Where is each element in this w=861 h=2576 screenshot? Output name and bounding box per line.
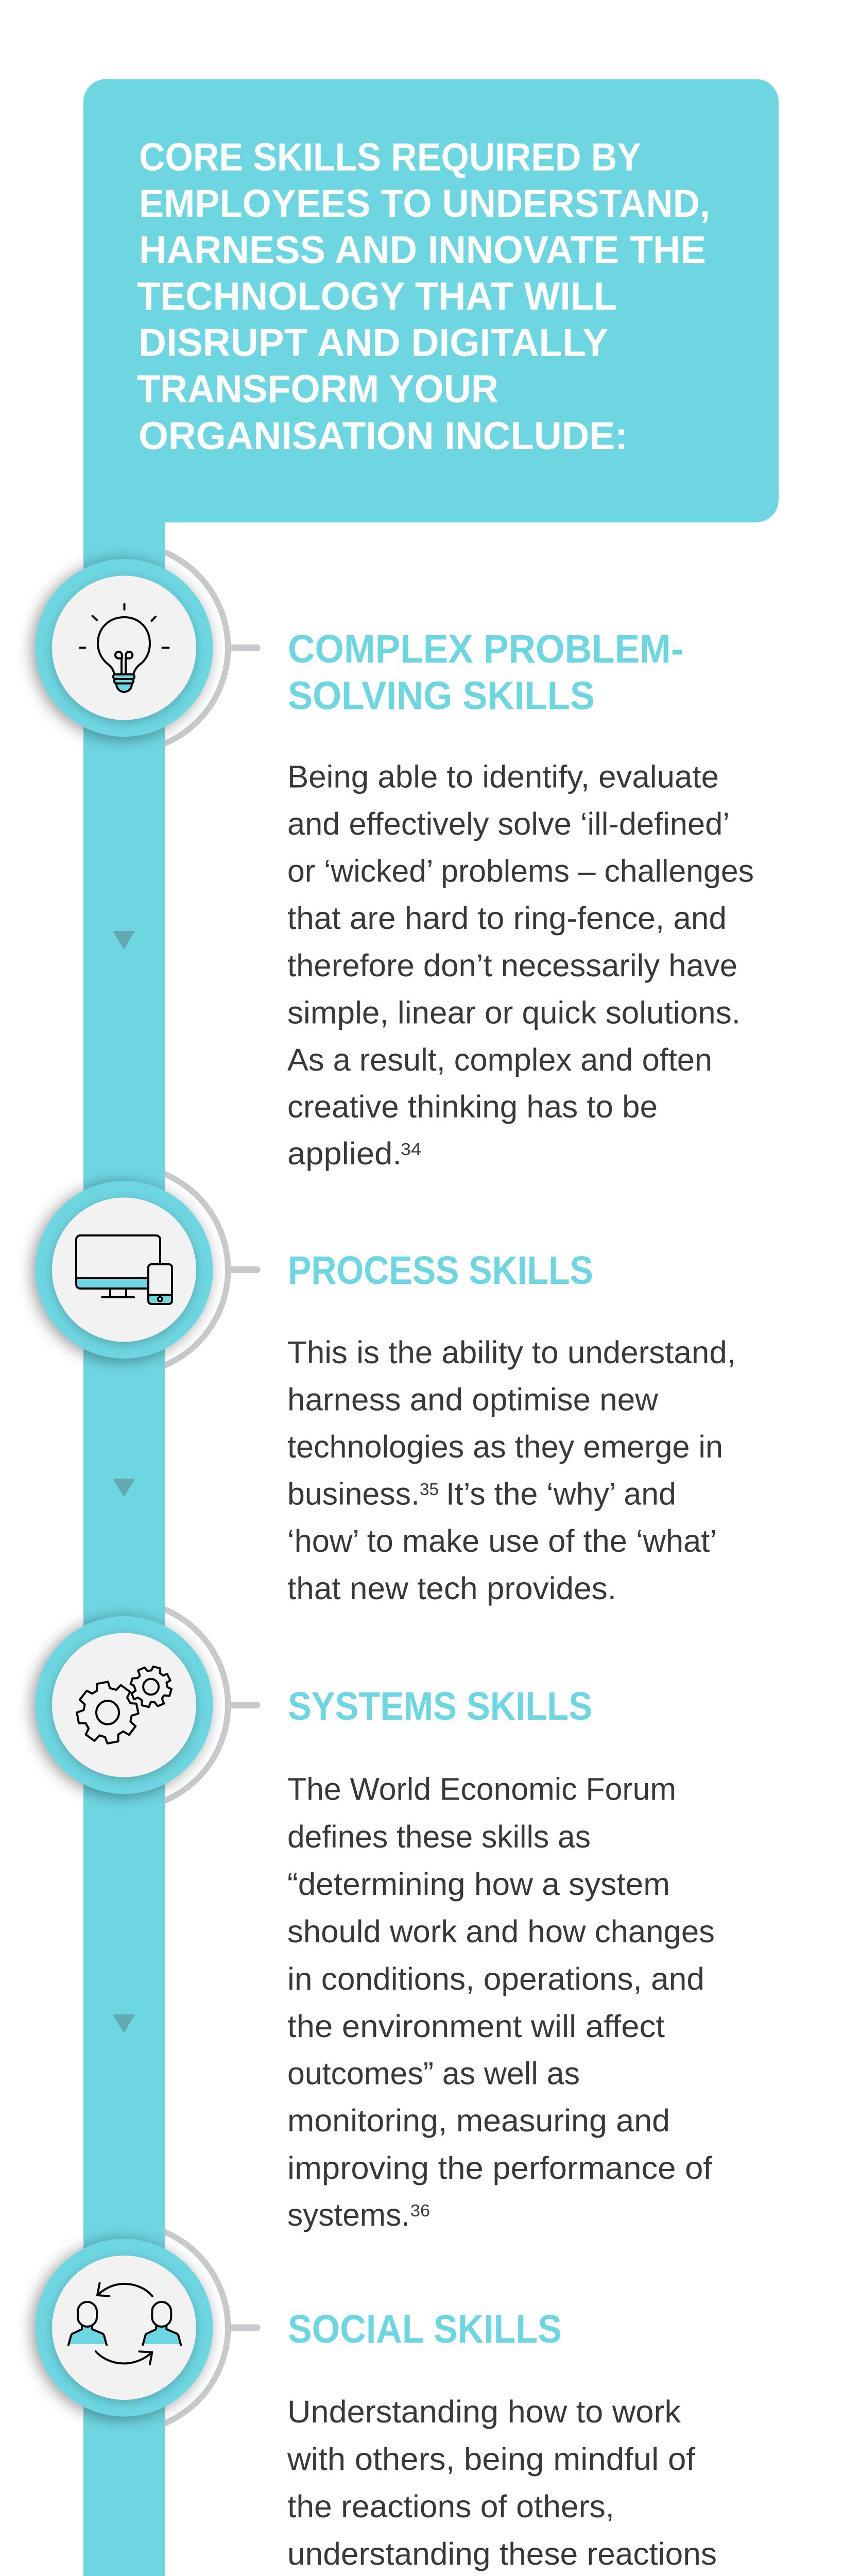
heading: SOCIAL SKILLS — [288, 2307, 562, 2351]
icon: monitor and phone — [76, 1235, 172, 1304]
text block: creative thinking has to be — [287, 1089, 658, 1124]
text block: systems. — [287, 2197, 410, 2232]
icon: lightbulb — [80, 604, 169, 692]
text block: therefore don’t necessarily have — [287, 948, 737, 983]
text block: and effectively solve ‘ill-defined’ — [287, 806, 730, 841]
text block: or ‘wicked’ problems – challenges — [287, 853, 754, 888]
text block — [287, 1771, 715, 2232]
text block: simple, linear or quick solutions. — [287, 995, 741, 1030]
title: ORGANISATION INCLUDE: — [139, 414, 628, 458]
text block: technologies as they emerge in — [287, 1429, 723, 1464]
text block: It’s the ‘why’ and — [446, 1477, 676, 1512]
text block: with others, being mindful of — [287, 2442, 696, 2477]
text block: This is the ability to understand, — [287, 1335, 736, 1370]
arrow — [113, 1479, 135, 1497]
text block: defines these skills as — [287, 1819, 591, 1854]
title: HARNESS AND INNOVATE THE — [139, 228, 706, 272]
node: lightbulb — [20, 544, 257, 752]
text block: 35 — [420, 1480, 439, 1499]
text block: The World Economic Forum — [287, 1771, 676, 1806]
text block: outcomes” as well as — [287, 2056, 580, 2091]
title: TECHNOLOGY THAT WILL — [137, 275, 617, 318]
text block: 36 — [410, 2201, 430, 2220]
arrow — [113, 2014, 135, 2033]
text block: understanding these reactions — [287, 2536, 717, 2571]
node: people — [20, 2224, 257, 2432]
text block — [287, 1335, 736, 1606]
text block: Understanding how to work — [287, 2394, 681, 2429]
text block: that new tech provides. — [287, 1571, 616, 1606]
node: gears — [20, 1601, 257, 1809]
text block — [287, 759, 754, 1171]
heading: PROCESS SKILLS — [288, 1248, 593, 1293]
text block: improving the performance of — [287, 2150, 713, 2185]
panel: social skills — [20, 2224, 732, 2576]
heading — [288, 627, 683, 718]
text block: harness and optimise new — [287, 1382, 659, 1417]
heading: SYSTEMS SKILLS — [288, 1684, 592, 1728]
text block: in conditions, operations, and — [287, 1961, 704, 1996]
text block: applied. — [287, 1136, 402, 1171]
text block: the environment will affect — [287, 2009, 665, 2044]
text block: 34 — [401, 1140, 421, 1159]
icon: two people exchanging — [68, 2283, 181, 2364]
panel: complex problem-solving skills — [20, 544, 754, 1171]
arrow — [113, 931, 135, 950]
title: EMPLOYEES TO UNDERSTAND, — [139, 182, 710, 226]
panel: systems skills — [20, 1601, 715, 2232]
node: devices — [20, 1166, 257, 1374]
text block: “determining how a system — [287, 1867, 670, 1902]
text block: that are hard to ring-fence, and — [287, 901, 727, 936]
text block: ‘how’ to make use of the ‘what’ — [287, 1523, 717, 1558]
text block: monitoring, measuring and — [287, 2103, 670, 2138]
title: CORE SKILLS REQUIRED BY — [139, 135, 641, 179]
title: TRANSFORM YOUR — [137, 367, 498, 411]
title — [137, 135, 710, 458]
text block: As a result, complex and often — [287, 1042, 712, 1077]
icon: gears — [77, 1667, 171, 1743]
text block: should work and how changes — [287, 1914, 715, 1949]
text block: Being able to identify, evaluate — [287, 759, 719, 794]
header panel and vertical timeline bar — [83, 79, 779, 2576]
text block: business. — [287, 1477, 420, 1512]
text block: the reactions of others, — [287, 2489, 614, 2524]
panel: process skills — [20, 1166, 736, 1606]
title: DISRUPT AND DIGITALLY — [139, 321, 608, 365]
heading: SOLVING SKILLS — [288, 674, 595, 718]
text block — [287, 2394, 732, 2576]
heading: COMPLEX PROBLEM- — [288, 627, 683, 671]
